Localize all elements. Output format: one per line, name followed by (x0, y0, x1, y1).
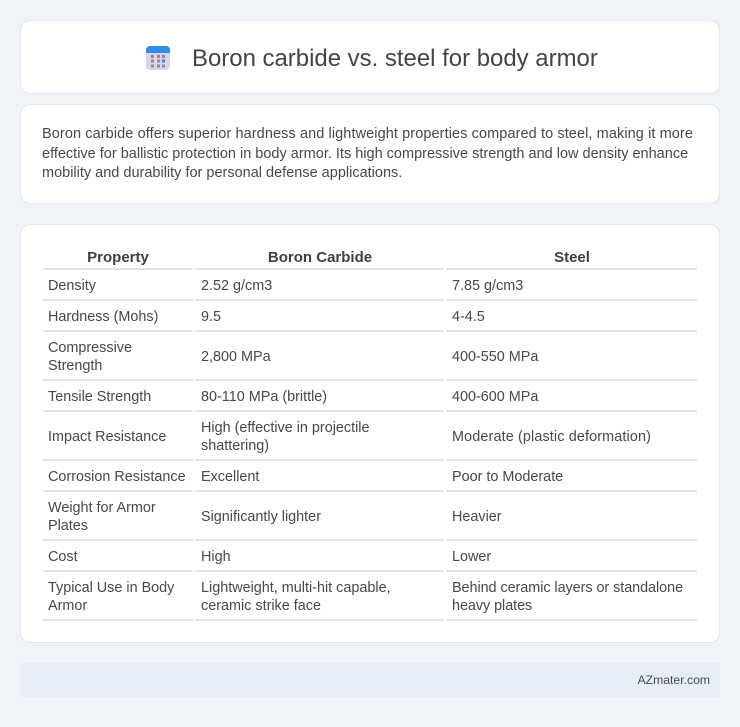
row: Density (48, 278, 523, 294)
table header: Boron Carbide: Boron Carbide (268, 249, 372, 266)
row: Typical Use in Body Armor: Behind ceramic layers or standalone (452, 580, 683, 596)
summary text: mobility and durability for personal defense applications. (42, 165, 402, 181)
row: Impact Resistance: Impact Resistance (48, 429, 166, 445)
row: Compressive Strength: Strength (48, 358, 102, 374)
row: Corrosion Resistance: Poor to Moderate (452, 469, 563, 485)
row: Density: 7.85 g/cm3 (452, 278, 523, 294)
row: Impact Resistance (48, 420, 651, 454)
summary card (20, 104, 720, 204)
row: Impact Resistance: High (effective in projectile (201, 420, 370, 436)
row: Weight for Armor Plates (48, 500, 502, 534)
row: Tensile Strength (48, 389, 538, 405)
row: Typical Use in Body Armor (48, 580, 683, 614)
row: Tensile Strength: 400-600 MPa (452, 389, 538, 405)
icon: calendar (146, 46, 170, 70)
table header: Property: Property (87, 249, 149, 266)
row: Weight for Armor Plates: Significantly lighter (201, 509, 321, 525)
row: Cost (48, 549, 491, 565)
row: Hardness: Hardness (Mohs) (48, 309, 158, 325)
row: Weight for Armor Plates: Heavier (452, 509, 502, 525)
row: Cost: Cost (48, 549, 78, 565)
row: Compressive Strength: 2,800 MPa (201, 349, 271, 365)
row: Weight for Armor Plates: Plates (48, 518, 88, 534)
row: Compressive Strength: 400-550 MPa (452, 349, 538, 365)
table header: Steel: Steel (554, 249, 590, 266)
footer bar (20, 663, 720, 697)
row: Compressive Strength: Compressive (48, 340, 132, 356)
comparison table panel (20, 224, 720, 643)
row: Density: 2.52 g/cm3 (201, 278, 272, 294)
row: Corrosion Resistance (48, 469, 563, 485)
row: Tensile Strength: 80-110 MPa (brittle) (201, 389, 327, 405)
row: Hardness (48, 309, 485, 325)
row: Hardness: 9.5 (201, 309, 221, 325)
row: Typical Use in Body Armor: Typical Use in Body (48, 580, 174, 596)
summary text (42, 126, 693, 181)
row: Typical Use in Body Armor: Armor (48, 598, 87, 614)
row: Typical Use in Body Armor: ceramic strike face (201, 598, 321, 614)
footer credit: AZmater.com (638, 673, 710, 687)
row: Cost: Lower (452, 549, 491, 565)
row: Corrosion Resistance: Corrosion Resistance (48, 469, 186, 485)
summary text: effective for ballistic protection in body armor. Its high compressive strength and low density enhance (42, 146, 688, 162)
row: Corrosion Resistance: Excellent (201, 469, 259, 485)
row: Weight for Armor Plates: Weight for Armor (48, 500, 156, 516)
row: Typical Use in Body Armor: Lightweight, multi-hit capable, (201, 580, 391, 596)
summary text: Boron carbide offers superior hardness and lightweight properties compared to steel, making it more (42, 126, 693, 142)
row: Density: Density (48, 278, 96, 294)
title card (20, 20, 720, 94)
row: Impact Resistance: Moderate (plastic deformation) (452, 429, 651, 445)
row: Cost: High (201, 549, 231, 565)
title: Boron carbide vs. steel for body armor (192, 45, 598, 72)
row: Impact Resistance: shattering) (201, 438, 269, 454)
row: Typical Use in Body Armor: heavy plates (452, 598, 532, 614)
row: Tensile Strength: Tensile Strength (48, 389, 151, 405)
row: Hardness: 4-4.5 (452, 309, 485, 325)
row: Compressive Strength (48, 340, 538, 374)
